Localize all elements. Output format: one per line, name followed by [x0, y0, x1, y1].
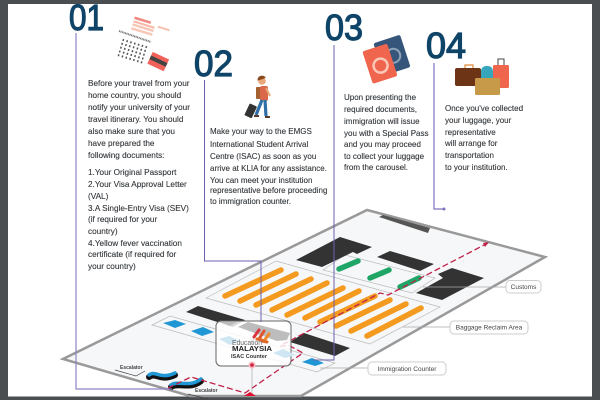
ISAC counter box — [216, 321, 296, 366]
text: step 1: 3.A Single-Entry Visa (SEV) — [88, 204, 189, 213]
text: step 2: International Student Arrival — [210, 140, 309, 149]
backpack — [256, 87, 261, 99]
text: step 3: Upon presenting the — [344, 93, 417, 102]
text: step 1: have prepared the — [88, 139, 155, 148]
text: step 1: 4.Yellow fever vaccination — [88, 239, 182, 248]
text: step 3: and you may proceed — [344, 140, 421, 149]
callout: baggage reclaim — [403, 321, 528, 334]
text: step 1 — [88, 79, 190, 271]
text: step 1: certificate (if required for — [88, 250, 177, 259]
floor slab — [63, 210, 545, 396]
icon: traveller with suitcase — [244, 76, 270, 118]
callout: immigration counter: Immigration Counter — [378, 366, 437, 373]
step 2 connector — [204, 80, 261, 322]
text: step 4: your luggage, your — [445, 116, 512, 125]
text: step 4: transportation — [445, 151, 494, 160]
text: step 2: representative before proceeding — [210, 186, 327, 195]
text: step 1: following documents: — [88, 151, 164, 160]
text: step 4: will arrange for — [444, 139, 498, 148]
step 1 connector — [76, 33, 172, 389]
escalator label one — [115, 365, 145, 376]
card — [147, 52, 169, 71]
escalators — [149, 373, 201, 387]
text: step 2: You can meet your institution — [210, 176, 312, 185]
route arrow end — [483, 242, 489, 247]
calendar dates — [118, 40, 147, 63]
text: step 1: Before your travel from your — [88, 79, 190, 88]
arm — [266, 88, 270, 96]
escalator label two — [188, 388, 218, 399]
text: step 3: to collect your luggage — [344, 152, 425, 161]
faded strip under box — [220, 322, 290, 341]
text: step 3 — [344, 93, 428, 172]
airport floor plan — [63, 210, 545, 399]
dark immigration strips — [186, 306, 350, 356]
callout: baggage reclaim: Baggage Reclaim Area — [456, 324, 523, 332]
tan bag — [475, 78, 500, 95]
text: step 4: representative — [445, 128, 496, 137]
step 3 connector — [313, 45, 334, 360]
text: step 3: required documents, — [344, 105, 417, 114]
head — [258, 77, 266, 85]
number 02: 02 — [194, 43, 233, 84]
red dashed route — [168, 243, 488, 393]
text: step 2: Make your way to the EMGS — [210, 127, 312, 136]
callout: customs: Customs — [511, 284, 537, 291]
text: step 1: (if required for your — [88, 215, 157, 224]
blue immigration counters — [163, 320, 324, 366]
entry marker — [244, 392, 256, 396]
icon: passports — [362, 35, 411, 84]
text: step 2: Centre (ISAC) as soon as you — [210, 152, 316, 161]
text: step 4: Once you've collected — [445, 104, 523, 113]
text: step 1: 1.Your Original Passport — [88, 168, 177, 177]
logo wordmark: MALAYSIA — [232, 346, 272, 353]
text: step 2: arrive at KLIA for any assistance. — [210, 164, 327, 173]
text: step 1: notify your university of your — [88, 103, 190, 112]
text: step 1: home country, you should — [88, 91, 182, 100]
navy passport — [373, 35, 411, 76]
text: step 1: also make sure that you — [88, 127, 175, 136]
text: step 2 — [210, 127, 327, 206]
text: step 3: you with a Special Pass — [344, 129, 428, 138]
legs — [256, 100, 266, 116]
orange baggage carousels — [225, 270, 421, 336]
shoes — [254, 116, 270, 117]
callout: customs — [423, 280, 541, 293]
text: step 1: 2.Your Visa Approval Letter — [88, 180, 187, 189]
baggage reclaim outline — [206, 261, 440, 344]
number 04: 04 — [426, 25, 466, 66]
step 4 connector with end dot — [434, 63, 446, 210]
suitcase — [244, 103, 257, 118]
brown suitcase — [455, 65, 481, 86]
text: step 1: travel itinerary. You should — [88, 115, 184, 124]
dark wall strip — [379, 215, 430, 233]
faded counters under box — [219, 336, 296, 358]
immigration outline — [152, 316, 335, 372]
text: step 2: to immigration counter. — [210, 197, 291, 206]
text: step 1: country) — [88, 227, 118, 236]
escalator label two: Escalator — [195, 388, 218, 394]
green customs counters — [339, 261, 419, 287]
red passport — [362, 44, 398, 84]
torso — [260, 86, 268, 101]
callout: immigration counter — [320, 362, 446, 375]
dark block right — [416, 268, 484, 300]
ticket — [131, 17, 170, 40]
counter pin — [248, 362, 256, 396]
red suitcase — [493, 59, 509, 88]
hair — [258, 76, 265, 80]
Education Malaysia logo mark — [254, 330, 269, 342]
number 03: 03 — [325, 7, 363, 48]
counter label: ISAC Counter — [231, 354, 268, 360]
calendar spiral — [119, 31, 151, 42]
escalator label one: Escalator — [120, 365, 143, 371]
dark block left — [296, 237, 372, 267]
logo text: Education — [232, 340, 262, 347]
customs outline — [323, 255, 435, 293]
teal backpack — [481, 66, 493, 83]
text: step 1: your country) — [88, 262, 136, 271]
text: step 1: (VAL) — [88, 192, 109, 201]
dark block middle — [377, 251, 434, 271]
text: step 4: to your institution. — [445, 163, 508, 172]
text: step 3: from the carousel. — [344, 163, 408, 172]
icon: luggage — [455, 59, 509, 95]
icon: itinerary and calendar — [118, 17, 170, 71]
text: step 3: immigration will issue — [344, 117, 420, 126]
text: step 4 — [444, 104, 523, 172]
